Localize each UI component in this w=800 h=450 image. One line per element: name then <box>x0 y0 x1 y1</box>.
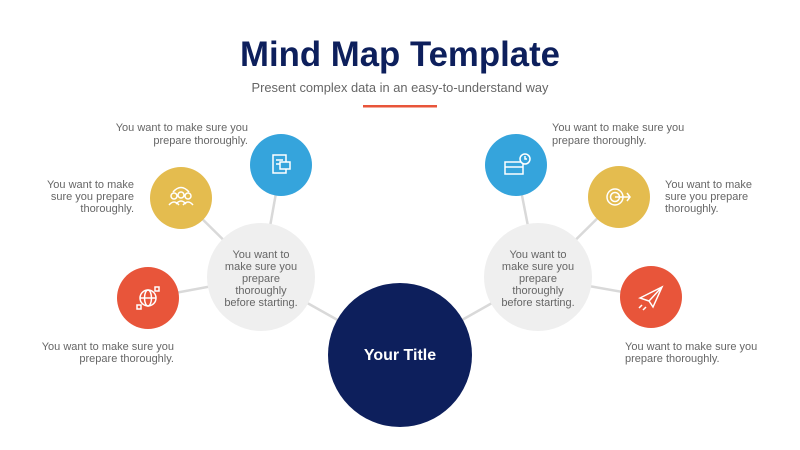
right gray hub: You want to <box>509 249 567 261</box>
text: left middle: sure you prepare <box>51 191 134 203</box>
icon: target (yellow) <box>588 166 650 228</box>
right gray hub: thoroughly <box>512 285 564 297</box>
left gray hub: before starting. <box>224 297 298 309</box>
text: right middle: thoroughly. <box>665 203 719 215</box>
left gray hub: You want to <box>232 249 290 261</box>
left gray hub <box>207 223 315 331</box>
text: left top: prepare thoroughly. <box>153 135 248 147</box>
text: right middle: You want to make <box>665 179 752 191</box>
text: left middle: You want to make <box>47 179 134 191</box>
left gray hub: thoroughly <box>235 285 287 297</box>
icon: people (yellow) <box>150 167 212 229</box>
text: left top: You want to make sure you <box>116 122 248 134</box>
central title circle: Your Title <box>364 347 436 364</box>
title: Mind Map Template <box>240 35 560 74</box>
subtitle: Present complex data in an easy-to-understand way <box>252 80 549 95</box>
icon: briefcase clock (blue) <box>485 134 547 196</box>
icon: paper plane (red) <box>620 266 682 328</box>
right gray hub <box>484 223 592 331</box>
icon: globe (red) <box>117 267 179 329</box>
text: right middle: sure you prepare <box>665 191 748 203</box>
text: right top: prepare thoroughly. <box>552 135 647 147</box>
connector lines <box>148 165 651 355</box>
right gray hub: prepare <box>519 273 557 285</box>
text: left bottom: prepare thoroughly. <box>79 353 174 365</box>
text: right top: You want to make sure you <box>552 122 684 134</box>
icon: document (blue) <box>250 134 312 196</box>
left gray hub: prepare <box>242 273 280 285</box>
left gray hub: make sure you <box>225 261 297 273</box>
right gray hub: before starting. <box>501 297 575 309</box>
accent underline <box>363 105 437 108</box>
central title circle <box>328 283 472 427</box>
text: right bottom: You want to make sure you <box>625 341 757 353</box>
text: left middle: thoroughly. <box>80 203 134 215</box>
right gray hub: make sure you <box>502 261 574 273</box>
text: left bottom: You want to make sure you <box>42 341 174 353</box>
text: right bottom: prepare thoroughly. <box>625 353 720 365</box>
